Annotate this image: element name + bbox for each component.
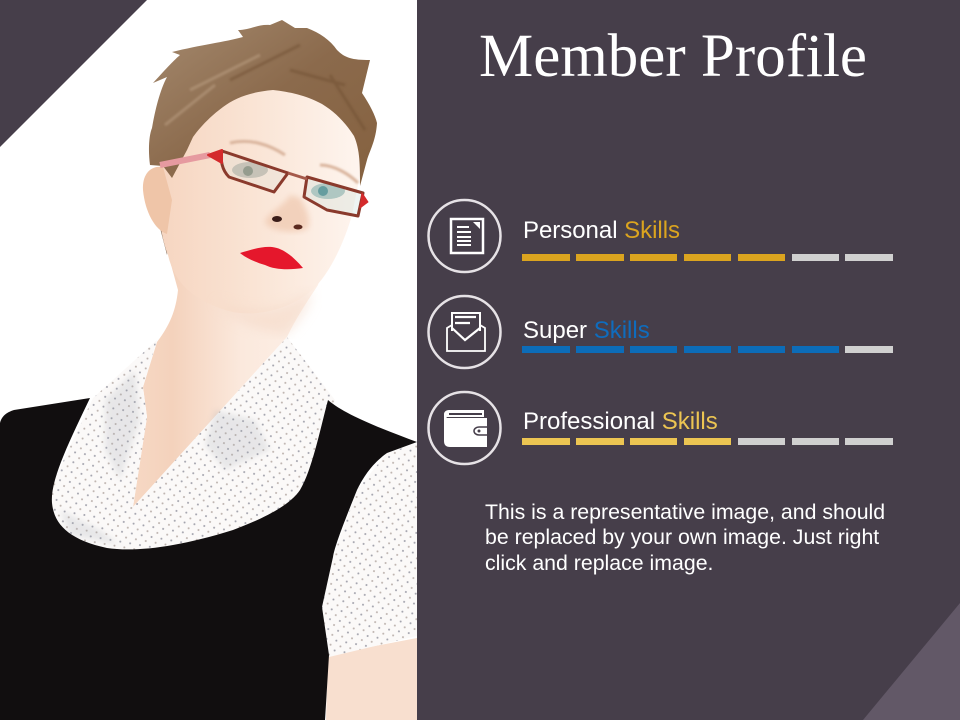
portrait: blouse — [40, 337, 335, 556]
portrait: eyes — [232, 162, 345, 199]
portrait: jaw shading — [215, 290, 312, 335]
description text: click and replace image. — [485, 551, 713, 575]
portrait: arm — [326, 638, 417, 720]
decoration: top-left triangle — [0, 0, 147, 147]
skill row: super skills — [428, 296, 893, 368]
description text: This is a representative image, and should — [485, 500, 885, 524]
label: super skills: Super Skills — [523, 317, 650, 344]
skill row: personal skills — [428, 200, 893, 272]
skill bar: 5 of 7 — [522, 254, 893, 261]
portrait: hair below ear — [160, 228, 170, 255]
portrait: lips — [240, 247, 303, 269]
label: personal skills: Personal Skills — [523, 217, 680, 244]
title: Member Profile — [479, 23, 867, 90]
decoration: bottom-right triangle — [863, 603, 960, 720]
skill bar: 4 of 7 — [522, 438, 893, 445]
portrait: eyebrows — [230, 141, 358, 183]
label: professional skills: Professional Skills — [523, 408, 718, 435]
icon: envelope — [428, 296, 500, 368]
portrait: neck — [133, 240, 330, 507]
icon: document — [428, 200, 500, 272]
portrait: face — [158, 85, 361, 313]
portrait: left sleeve sliver — [0, 520, 6, 570]
portrait: black vest — [0, 398, 417, 720]
portrait: hair — [149, 20, 377, 186]
portrait: glasses — [160, 150, 368, 216]
panel: right dark panel — [417, 0, 960, 720]
skill row: professional skills — [428, 392, 893, 464]
portrait: blouse sleeve — [322, 443, 417, 657]
portrait: nose — [265, 195, 309, 232]
icon: wallet — [428, 392, 500, 464]
portrait: blouse shading — [60, 370, 270, 545]
portrait: ear — [143, 167, 172, 234]
description text: be replaced by your own image. Just right — [485, 525, 879, 549]
image: portrait of woman — [0, 20, 417, 720]
portrait: hair highlights — [165, 45, 365, 130]
panel: photo background — [0, 0, 417, 720]
skill bar: 6 of 7 — [522, 346, 893, 353]
